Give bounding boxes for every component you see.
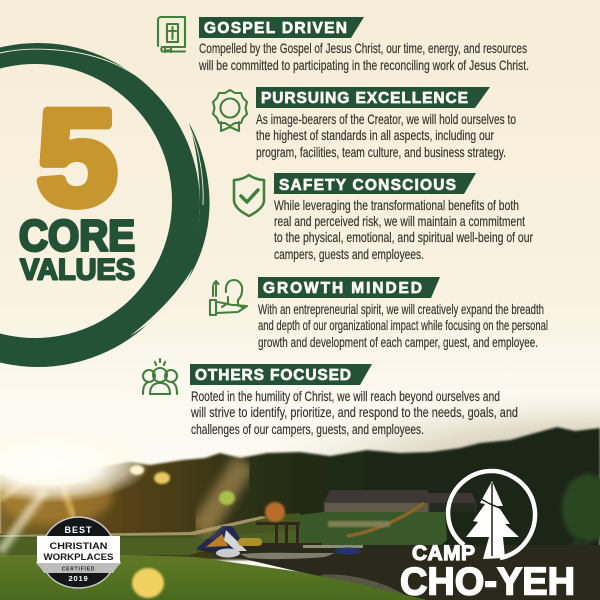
value: safety conscious xyxy=(234,173,533,262)
badge: best christian workplaces: CERTIFIED xyxy=(62,566,95,572)
campers on lawn xyxy=(328,521,390,527)
heading: GROWTH MINDED xyxy=(263,280,422,297)
description: will strive to identify, prioritize, and respond to the needs, goals, and xyxy=(190,405,518,420)
description: While leveraging the transformational benefits of both xyxy=(274,198,519,213)
logo: camp cho-yeh xyxy=(400,471,575,600)
foreground grass xyxy=(0,555,427,600)
value: pursuing excellence xyxy=(213,87,516,160)
badge: best christian workplaces xyxy=(37,517,120,588)
lodge xyxy=(323,490,476,512)
banner xyxy=(258,277,440,298)
badge: best christian workplaces: 2019 xyxy=(69,574,88,583)
description: campers, guests and employees. xyxy=(274,247,424,262)
value: growth minded xyxy=(210,277,548,350)
slide xyxy=(347,503,424,536)
description: As image-bearers of the Creator, we will hold ourselves to xyxy=(256,112,516,127)
heading: PURSUING EXCELLENCE xyxy=(261,90,468,107)
icon: bible xyxy=(158,17,185,52)
heading: OTHERS FOCUSED xyxy=(195,367,351,384)
icon: shield xyxy=(234,175,264,216)
heading: GOSPEL DRIVEN xyxy=(204,20,347,37)
description: real and perceived risk, we will maintain a commitment xyxy=(274,214,525,229)
banner xyxy=(256,87,490,108)
icon: group of people xyxy=(143,359,177,394)
icon: person with hand and arrow xyxy=(210,280,247,315)
photo: camp lake at sunset xyxy=(0,395,600,600)
description: Rooted in the humility of Christ, we will reach beyond ourselves and xyxy=(191,389,500,404)
icon: rosette xyxy=(213,90,247,131)
badge: best christian workplaces: WORKPLACES xyxy=(44,552,114,562)
badge: best christian workplaces: CHRISTIAN xyxy=(50,541,108,551)
logo ring and tree xyxy=(448,471,535,559)
logo wordmark: CAMP: CAMP xyxy=(412,542,475,565)
description: the highest of standards in all aspects, including our xyxy=(256,128,494,143)
banner xyxy=(190,364,372,385)
hillside lawn xyxy=(300,512,447,546)
green bushes right xyxy=(562,474,600,542)
raft xyxy=(335,548,361,554)
value: gospel driven xyxy=(158,17,529,73)
lens flares xyxy=(130,465,285,598)
description: challenges of our campers, guests, and employees. xyxy=(191,422,424,437)
inflatable water toy xyxy=(196,526,262,558)
value: others focused xyxy=(143,359,518,437)
sun glow xyxy=(0,427,245,552)
far lawn left xyxy=(0,513,300,548)
badge: best christian workplaces: BEST xyxy=(64,525,93,535)
banner xyxy=(274,173,476,194)
tree line xyxy=(0,427,600,560)
lake xyxy=(196,545,600,600)
big number 5: 5 xyxy=(37,82,117,233)
heading: CORE: CORE xyxy=(19,212,135,260)
banner xyxy=(199,17,364,38)
heading: VALUES: VALUES xyxy=(20,254,135,286)
description: program, facilities, team culture, and business strategy. xyxy=(256,145,506,160)
heading: SAFETY CONSCIOUS xyxy=(279,177,456,194)
dock xyxy=(256,522,322,546)
brush ring xyxy=(0,43,210,367)
